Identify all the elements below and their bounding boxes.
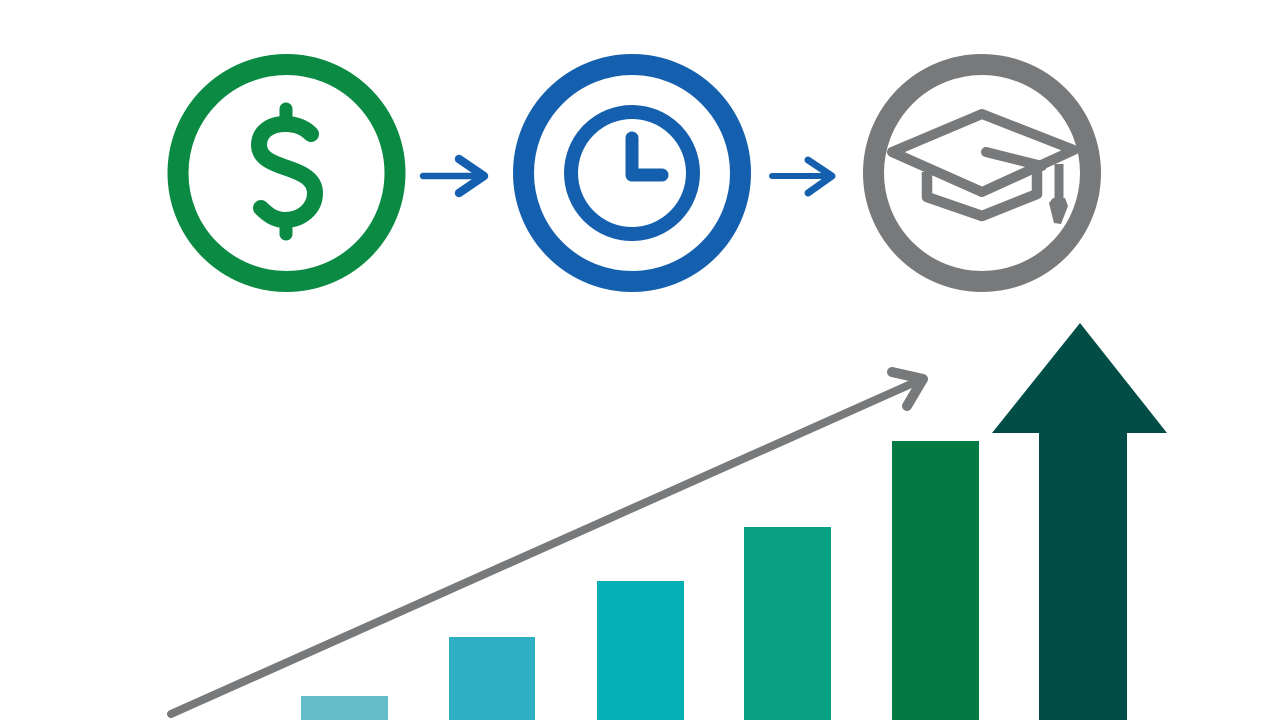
bar 1 [301, 696, 388, 720]
arrow: grey trend line [171, 372, 923, 714]
bar 3 [597, 581, 684, 720]
bar 2 [449, 637, 535, 720]
icon: dollar in green circle [178, 64, 395, 282]
arrow: large dark green up arrow [992, 323, 1167, 720]
bar chart: rising bars [301, 441, 979, 720]
bar 4 [744, 527, 831, 720]
icon: clock in blue circle [524, 64, 740, 282]
arrow: money to time [423, 159, 484, 193]
icon: graduation cap in grey circle [874, 64, 1090, 282]
arrow: time to education [772, 160, 832, 193]
bar 5 [892, 441, 979, 720]
